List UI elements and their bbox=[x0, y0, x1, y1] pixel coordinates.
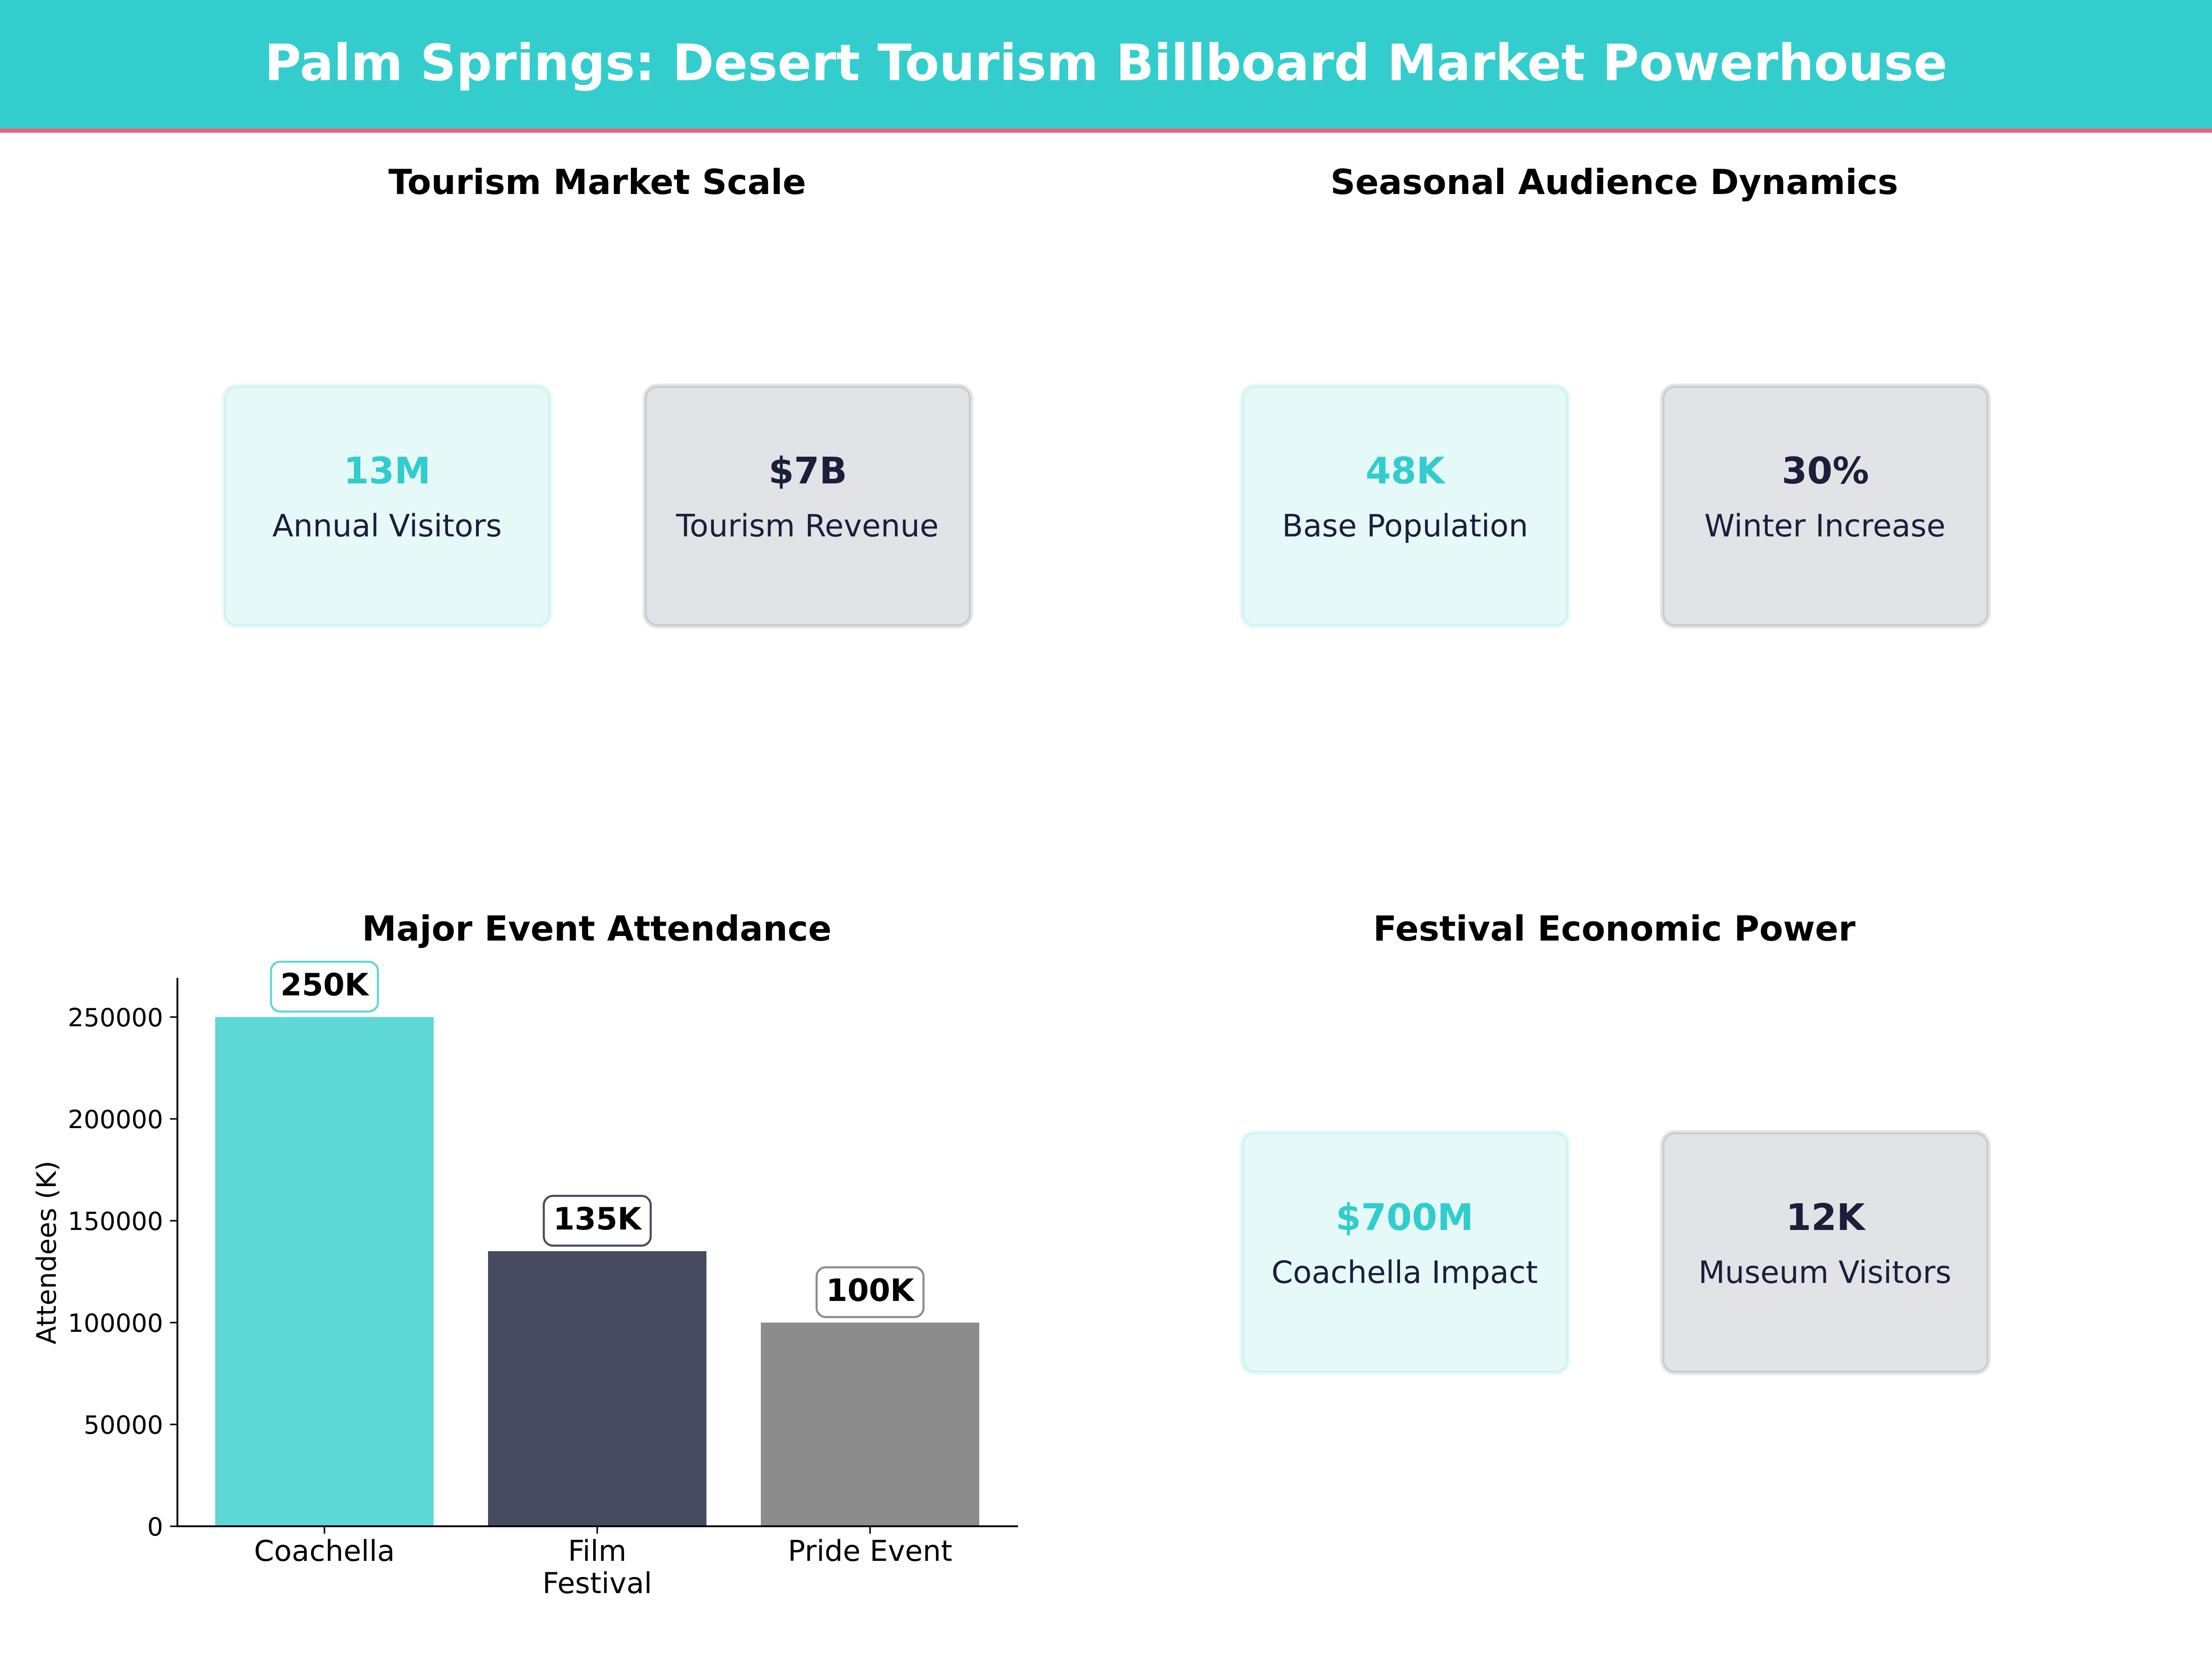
title: Palm Springs: Desert Tourism Billboard Market Powerhouse bbox=[265, 34, 1947, 92]
header banner bbox=[0, 0, 2212, 133]
x axis category labels: Coachella bbox=[254, 1534, 395, 1568]
bar: pride event bbox=[761, 1323, 979, 1526]
y axis label: Attendees (K) bbox=[31, 1161, 62, 1344]
stat card: base population: Base Population bbox=[1282, 508, 1528, 544]
y axis tick labels: 250000 bbox=[68, 1003, 163, 1032]
y axis tick labels: 50000 bbox=[84, 1411, 163, 1440]
stat card: annual visitors: 13M bbox=[344, 449, 430, 492]
stat card: base population bbox=[1242, 386, 1568, 626]
stat card: museum visitors: Museum Visitors bbox=[1698, 1254, 1952, 1290]
stat card: base population: 48K bbox=[1365, 449, 1446, 492]
value label: 250K bbox=[271, 962, 378, 1012]
stat card: tourism revenue: $7B bbox=[769, 449, 847, 492]
value label: 135K bbox=[544, 1196, 651, 1246]
value label: 100K: 100K bbox=[826, 1272, 915, 1308]
panel: seasonal audience dynamics bbox=[1242, 162, 1988, 626]
stat card: museum visitors bbox=[1662, 1132, 1988, 1373]
value label: 250K: 250K bbox=[281, 967, 370, 1003]
heading: festival economic power: Festival Economic Power bbox=[1373, 908, 1855, 949]
x axis category labels bbox=[254, 1534, 952, 1600]
heading: major event attendance: Major Event Attendance bbox=[362, 908, 831, 949]
stat card: tourism revenue bbox=[645, 386, 971, 626]
stat card: tourism revenue: Tourism Revenue bbox=[676, 508, 939, 544]
stat card: winter increase: Winter Increase bbox=[1704, 508, 1946, 544]
y axis tick labels bbox=[68, 1003, 163, 1541]
bar chart bbox=[31, 962, 1018, 1600]
panel: major event attendance bbox=[31, 908, 1018, 1600]
bar: film festival bbox=[488, 1251, 706, 1526]
x axis category labels: Film bbox=[568, 1534, 627, 1568]
y axis tick labels: 100000 bbox=[68, 1309, 163, 1338]
y axis tick labels: 0 bbox=[147, 1512, 163, 1541]
axes bbox=[170, 978, 1018, 1534]
stat card: museum visitors: 12K bbox=[1786, 1196, 1866, 1239]
value label: 135K: 135K bbox=[553, 1201, 642, 1237]
stat card: annual visitors bbox=[224, 386, 550, 626]
heading: tourism market scale: Tourism Market Scale bbox=[388, 162, 806, 202]
y axis tick labels: 200000 bbox=[68, 1105, 163, 1134]
stat card: winter increase: 30% bbox=[1782, 449, 1869, 492]
stat card: coachella impact bbox=[1242, 1132, 1568, 1373]
value label: 100K bbox=[817, 1267, 924, 1317]
heading: seasonal audience dynamics: Seasonal Audience Dynamics bbox=[1330, 162, 1898, 202]
panel: festival economic power bbox=[1242, 908, 1988, 1373]
panel: tourism market scale bbox=[224, 162, 971, 626]
x axis category labels: Festival bbox=[542, 1566, 652, 1600]
stat card: winter increase bbox=[1662, 386, 1988, 626]
stat card: coachella impact: Coachella Impact bbox=[1271, 1254, 1538, 1290]
bar: coachella bbox=[215, 1017, 434, 1526]
stat card: annual visitors: Annual Visitors bbox=[272, 508, 502, 544]
y axis tick labels: 150000 bbox=[68, 1207, 163, 1236]
stat card: coachella impact: $700M bbox=[1335, 1196, 1474, 1239]
x axis category labels: Pride Event bbox=[788, 1534, 952, 1568]
